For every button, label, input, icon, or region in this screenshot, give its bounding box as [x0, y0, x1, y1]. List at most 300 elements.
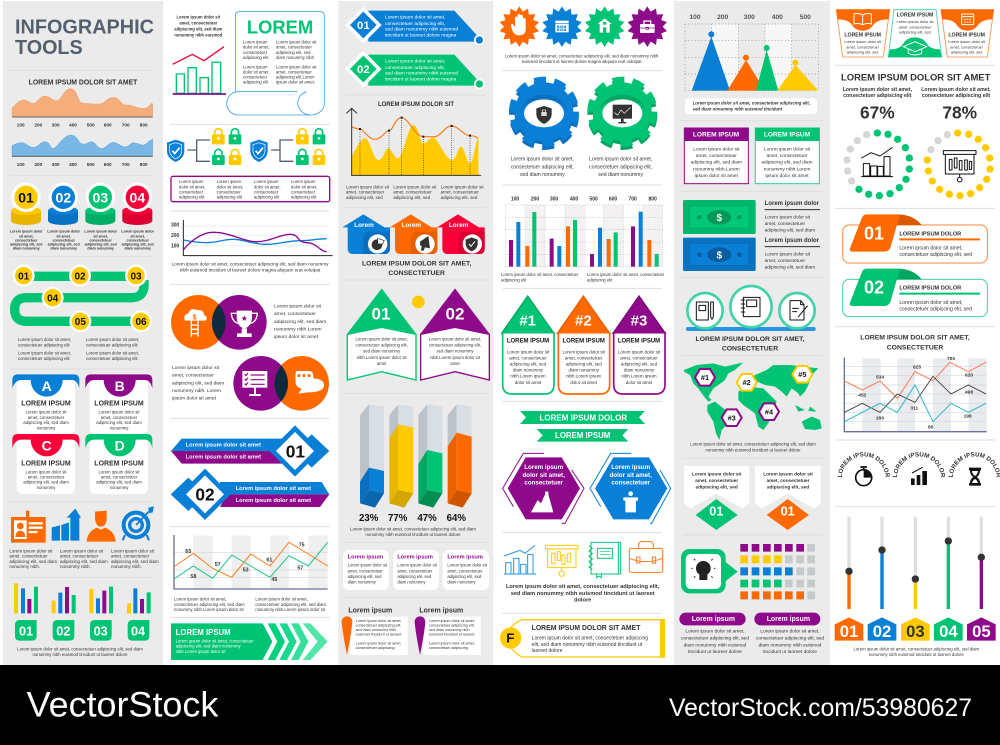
- purple text box: Lorem ipsum: [254, 179, 279, 184]
- pill right: Lorem ipsum dolor sit amet,: [760, 629, 820, 635]
- callout 02: sed diam nonummy nibh euismod: [385, 71, 458, 77]
- heading: area line chart: LOREM IPSUM DOLOR SIT: [378, 102, 454, 108]
- callout 01: consectetuer adipiscing elit,: [385, 21, 445, 27]
- number tags: 01: [19, 624, 33, 638]
- footer bar: VectorStock: [27, 686, 219, 725]
- stat text left: consectetuer adipiscing elit: [843, 93, 912, 99]
- area chart: orange: 400: [69, 123, 77, 128]
- gear captions: Lorem ipsum dolor sit amet,: [511, 157, 574, 163]
- F callout: elit, sed diam nonummy nibh euismod tincidunt ut: [532, 642, 643, 648]
- snake timeline: [13, 265, 152, 332]
- house number tags: 02: [873, 622, 891, 641]
- wave line chart: [171, 220, 333, 256]
- venn diagram 2: [233, 356, 329, 411]
- numbered card 01: Lorem ipsum dolor sit amet,: [899, 246, 963, 252]
- card C: [12, 434, 79, 494]
- slider caption: Lorem ipsum dolor sit amet, consectetuer adipiscing elit, sed diam: [854, 647, 980, 652]
- venn diagram 1: $: [193, 312, 197, 321]
- green text box: [755, 128, 820, 184]
- purple text box: adipiscing elit: [254, 195, 280, 200]
- wave line chart: 100: [171, 243, 180, 249]
- banknote blue: [683, 238, 756, 271]
- pucks captions: Lorem ipsum dolor: [10, 230, 43, 234]
- kite card green: amet, consectetuer: [695, 478, 738, 484]
- venn 1 text: ipsum dolor sit amet: [274, 334, 319, 340]
- timeline captions: Lorem ipsum dolor sit amet,: [86, 351, 139, 356]
- number tags: 04: [131, 624, 145, 638]
- rank card 3: [613, 296, 665, 394]
- number tags: [15, 620, 149, 641]
- tab card right: adipiscing elit, sed: [951, 51, 982, 55]
- F callout: laoreet dolore: [532, 648, 563, 654]
- rank card 3: LOREM IPSUM: [618, 339, 660, 345]
- rank card 3: #3: [631, 313, 647, 330]
- timeline captions: Lorem ipsum dolor sit amet,: [18, 351, 71, 356]
- pucks captions: diam nonummy: [87, 247, 114, 251]
- chart note box: Lorem ipsum dolor sit amet, consectetuer adipiscing elit,: [693, 100, 810, 105]
- chart captions: nonummy nibh.Lorem ipsum dolor sit: [255, 607, 326, 612]
- pill left: Lorem ipsum dolor sit amet,: [685, 629, 745, 635]
- teardrop note right: sed diam nonummy nibh: [429, 628, 470, 632]
- mini bar charts: [14, 583, 151, 613]
- chart captions: Lorem ipsum dolor sit amet,: [255, 597, 308, 602]
- icon: id card: [11, 511, 46, 543]
- three text cards: adipiscing elit, sed: [348, 574, 382, 579]
- column chart captions: adipiscing elit: [501, 278, 527, 283]
- scroll panel: consectetuer: [243, 75, 268, 80]
- purple text box: dolor sit amet,: [291, 185, 318, 190]
- three text cards: adipiscing elit, sed: [397, 574, 432, 579]
- three text cards: diam nonummy: [397, 580, 426, 585]
- timeline captions: consectetuer adipiscing elit: [86, 342, 138, 347]
- house card 01: amet: [377, 361, 387, 366]
- icon captions: adipiscing elit, sed diam: [111, 559, 159, 564]
- icon: outline chart: [504, 545, 536, 574]
- scroll panel: Lorem ipsum dolor sit: [276, 40, 317, 45]
- arrow house blue: Lorem: [354, 222, 374, 229]
- scroll panel: Lorem ipsum: [243, 40, 268, 45]
- area chart: orange: 300: [52, 123, 60, 128]
- timeline captions: Lorem ipsum dolor sit amet,: [18, 337, 71, 342]
- callout 02: [345, 51, 485, 89]
- purple text box: consectetuer: [217, 190, 241, 195]
- ribbon 2: LOREM IPSUM: [555, 431, 610, 440]
- area chart: blue: 600: [104, 162, 112, 167]
- card A: LOREM IPSUM: [21, 401, 71, 408]
- pucks captions: consectetuer: [15, 238, 38, 242]
- pill left: diam nonummy nibh euismod: [684, 642, 747, 648]
- teardrop note left: [342, 607, 408, 655]
- arrow house red: Lorem: [449, 222, 469, 229]
- house card 01: Lorem ipsum dolor sit amet,: [355, 337, 408, 342]
- 3d bar chart: 77%: [388, 513, 408, 524]
- kite card orange: 01: [781, 504, 795, 518]
- scroll panel: amet, consectetuer: [276, 69, 312, 74]
- gear green: [591, 80, 654, 147]
- panel: grey column 3: [338, 1, 493, 665]
- multi line chart: 198: [964, 414, 972, 420]
- arrow banner 01: [171, 425, 329, 477]
- F callout: LOREM IPSUM DOLOR SIT AMET: [532, 625, 641, 632]
- purple text box: dolor sit amet,: [217, 185, 243, 190]
- title: INFOGRAPHIC: [15, 16, 154, 38]
- rank card 2: [557, 296, 610, 394]
- tab card left: Lorem ipsum dolor sit: [844, 40, 882, 44]
- footer bar: VectorStock.com/53980627: [669, 695, 972, 722]
- F callout: Lorem ipsum dolor sit amet, consectetuer adipiscing: [532, 636, 648, 642]
- green chevron banner: adipiscing elit, sed diam nonummy: [176, 644, 242, 649]
- card D: [85, 434, 152, 494]
- multi line chart: 311: [910, 405, 919, 411]
- three text cards: adipiscing elit, sed: [447, 574, 482, 579]
- tab card middle: [888, 10, 942, 57]
- F callout: F: [506, 631, 514, 646]
- heading: consectetuer: CONSECTETUER: [388, 270, 445, 277]
- rank card 2: Lorem ipsum dolor sit: [563, 350, 606, 355]
- ribbon 2: [537, 429, 628, 442]
- banknote blue: $: [717, 250, 723, 261]
- title: TOOLS: [15, 37, 83, 59]
- banknote notes: amet, consectetuer: [765, 221, 805, 227]
- green text box: nonummy nibh.Lorem: [764, 166, 810, 172]
- rank card 1: nibh.Lorem ipsum: [510, 374, 546, 379]
- timeline captions: [18, 337, 139, 361]
- three text cards: Lorem ipsum dolor sit: [447, 563, 488, 568]
- circled icons row: [686, 286, 816, 331]
- arrow house blue: [342, 214, 390, 254]
- column chart: 100: [511, 197, 519, 203]
- stat text left: Lorem ipsum dolor sit amet,: [843, 87, 913, 93]
- chart captions: Lorem ipsum dolor sit: [441, 185, 484, 190]
- house number tags: 03: [906, 622, 925, 641]
- multi line chart: 498: [965, 389, 973, 395]
- tab card right: amet, consectetuer: [950, 45, 984, 49]
- column chart: 300: [550, 197, 558, 203]
- callout 02: Lorem ipsum dolor sit amet,: [385, 59, 445, 65]
- gear captions right: sed diam nonummy: [598, 172, 643, 178]
- card B: [85, 374, 152, 434]
- tab card right: LOREM IPSUM: [948, 33, 985, 39]
- F callout: [500, 619, 665, 658]
- starburst caption: Lorem ipsum dolor sit amet, consectetuer adipiscing elit, sed diam nonummy nibh: [505, 54, 659, 59]
- shields and locks: [167, 129, 325, 165]
- scroll panel: diam nonummy nibh: [276, 55, 315, 60]
- icon captions: Lorem ipsum dolor sit: [111, 549, 155, 554]
- slider chart: [845, 517, 985, 609]
- multi line chart: 534: [876, 375, 884, 381]
- chart captions: Lorem ipsum dolor sit: [393, 185, 437, 190]
- teardrop note left: Lorem ipsum dolor sit amet,: [356, 642, 402, 646]
- card B: amet, consectetuer: [101, 415, 138, 420]
- column chart: 700: [628, 197, 637, 203]
- chart captions: Lorem ipsum dolor sit amet,: [174, 597, 226, 602]
- tab card left: LOREM IPSUM: [844, 33, 881, 39]
- 3d bar chart: 47%: [417, 513, 437, 524]
- three text cards: amet, consectetuer: [397, 568, 433, 573]
- banknote notes: amet, consectetuer: [765, 258, 805, 264]
- callout 02: tincidunt ut laoreet dolore magna: [385, 77, 457, 83]
- dot ring yellow: [924, 129, 994, 199]
- ribbon 1: LOREM IPSUM DOLOR: [540, 413, 627, 422]
- card C: adipiscing elit, sed diam: [23, 480, 69, 485]
- card B: B: [115, 378, 125, 394]
- pill right: consectetuer adipiscing elit, sed: [756, 636, 824, 642]
- pill left: Lorem ipsum: [692, 616, 735, 623]
- teardrop note left: euismod tincidunt ut laoreet: [356, 633, 401, 637]
- pucks captions: consectetuer: [89, 238, 112, 242]
- multi line chart: 85: [928, 424, 934, 430]
- three text cards: Lorem ipsum: [397, 554, 433, 560]
- rank card 1: LOREM IPSUM: [507, 339, 549, 345]
- area line chart: [346, 108, 481, 175]
- venn 2 text: nonummy nibh. Lorem: [172, 388, 221, 394]
- rank card 3: Lorem ipsum dolor sit: [618, 350, 661, 355]
- purple text box: Lorem ipsum: [179, 179, 204, 184]
- icon captions: Lorem ipsum dolor sit: [60, 549, 104, 554]
- callout 01: 01: [357, 20, 370, 32]
- numbered card 02: Lorem ipsum dolor sit amet,: [899, 300, 963, 306]
- tab card middle: Lorem ipsum dolor sit: [897, 20, 934, 24]
- icons caption: Lorem ipsum dolor sit amet, consectetuer adipiscing elit,: [506, 584, 660, 590]
- card C: LOREM IPSUM: [21, 460, 71, 467]
- arrow house red: [437, 214, 485, 254]
- purple text box: LOREM IPSUM: [693, 132, 740, 139]
- green text box: ipsum dolor sit amet: [765, 173, 809, 179]
- scroll panel: dolor sit amet,: [243, 69, 270, 74]
- percentages: 78%: [942, 102, 977, 122]
- three text cards: amet, consectetuer: [447, 568, 483, 573]
- starburst caption: euismod tincidunt ut laoreet dolore magna aliquam erat volutpat: [522, 59, 642, 64]
- card A: adipiscing elit, sed diam: [23, 420, 69, 425]
- kite card orange: amet, consectetuer: [766, 478, 810, 484]
- timeline captions: Lorem ipsum dolor sit amet,: [86, 337, 139, 342]
- yellow dot: [412, 296, 425, 308]
- arrow banner 02: [171, 469, 329, 520]
- chart captions: consectetuer adipiscing elit, sed diam: [255, 602, 326, 607]
- area chart: blue: [12, 135, 153, 167]
- callout 01: sed diam nonummy nibh euismod: [385, 27, 458, 33]
- square grid chart: [740, 544, 815, 599]
- three text cards: Lorem ipsum dolor sit: [348, 563, 388, 568]
- stat text right: Lorem ipsum dolor sit amet,: [921, 87, 991, 93]
- kite card orange: [755, 466, 821, 530]
- chart note box: sed diam nonummy nibh euismod tincidunt: [693, 106, 783, 111]
- house card 02: sed diam nonummy: [436, 349, 474, 354]
- purple text box: adipiscing elit: [217, 195, 243, 200]
- green chevron banner: LOREM IPSUM: [176, 628, 231, 637]
- column 3 upper: [342, 7, 490, 380]
- world map: [684, 362, 822, 440]
- venn 2 text: adipiscing elit, sed diam: [172, 380, 224, 386]
- zigzag line chart: 61: [266, 557, 272, 563]
- tab card middle: amet, consectetuer: [899, 25, 932, 29]
- green text box: Lorem ipsum dolor sit: [764, 147, 811, 153]
- icon captions: amet, consectetuer: [111, 554, 150, 559]
- rank card 2: diam nonummy: [569, 368, 600, 373]
- heading: area charts: LOREM IPSUM DOLOR SIT AMET: [29, 80, 138, 87]
- purple text box: adipiscing elit: [291, 195, 317, 200]
- wave line chart: 300: [171, 223, 180, 229]
- column 1 lower: [9, 337, 159, 657]
- purple text box: [684, 128, 749, 184]
- multi line chart: 625: [913, 365, 921, 371]
- area chart: orange: 700: [122, 123, 130, 128]
- numbered card 01: [843, 214, 987, 263]
- teardrop note left: Lorem ipsum dolor sit amet,: [356, 619, 402, 623]
- card A: [12, 374, 79, 434]
- teardrop note left: consectetuer adipiscing elit,: [356, 623, 401, 627]
- area chart: blue: 500: [87, 162, 95, 167]
- purple text box: ipsum dolor sit amet: [695, 173, 739, 179]
- triangle chart: 400: [772, 14, 783, 21]
- gear captions right: consectetuer adipiscing elit,: [589, 164, 652, 170]
- card C: C: [42, 438, 52, 454]
- numbered card 01: consectetuer adipiscing elit, sed: [899, 252, 972, 258]
- numbered card 01: 01: [864, 223, 884, 243]
- gear captions right: Lorem ipsum dolor sit amet,: [589, 157, 652, 163]
- column chart captions: Lorem ipsum dolor sit amet, consectetuer: [587, 272, 665, 277]
- intro text: amet, consectetuer: [179, 21, 218, 26]
- bottom caption: Lorem ipsum dolor sit amet, consectetuer adipiscing elit, sed diam: [17, 647, 143, 652]
- callout 01: Lorem ipsum dolor sit amet,: [385, 15, 445, 21]
- pucks captions: adipiscing elit, sed: [85, 243, 117, 247]
- timeline captions: consectetuer adipiscing elit: [86, 356, 138, 361]
- triangle chart: 200: [717, 14, 729, 21]
- rank card 1: adipiscing elit, sed: [510, 362, 547, 367]
- hexagon blue: consectetuer: [611, 480, 651, 487]
- three text cards: [343, 550, 489, 590]
- chart captions: adipiscing elit, sed: [441, 195, 478, 200]
- pucks captions: consectetuer: [126, 238, 149, 242]
- icon captions: nonummy nibh.: [111, 564, 142, 569]
- scroll panel: consectetuer: [243, 50, 268, 55]
- tab card middle: LOREM IPSUM: [897, 13, 933, 19]
- area chart: orange: 500: [87, 123, 95, 128]
- column chart: [506, 197, 662, 267]
- slider caption: nonummy nibh euismod tincidunt ut laoreet dolore: [869, 652, 964, 657]
- arc label stopwatch: LOREM IPSUM DOLOR: [838, 452, 890, 478]
- icon: outline presentation board: [546, 545, 578, 576]
- heading: world map: CONSECTETUER: [722, 346, 778, 353]
- teardrop note right: Lorem ipsum dolor sit amet,: [429, 642, 475, 646]
- tab card left: adipiscing elit, sed: [847, 51, 878, 55]
- number tags: 03: [94, 624, 108, 638]
- scroll panel: adipiscing elit.Lorem: [276, 75, 315, 80]
- numbered pucks: 04: [130, 189, 145, 205]
- chart captions: nonummy nibh.Lorem ipsum dolor sit: [174, 607, 245, 612]
- column 4 upper: [500, 6, 667, 394]
- arrow banner 02: 02: [195, 485, 215, 505]
- rank card 1: dolor sit amet: [515, 380, 542, 385]
- hexagon blue: [590, 453, 671, 523]
- column chart: 500: [589, 197, 598, 203]
- rank card 2: nibh.Lorem ipsum: [566, 374, 602, 379]
- zigzag line chart: 45: [271, 577, 277, 583]
- numbered pucks: 02: [56, 189, 71, 205]
- zigzag line chart: 65: [185, 549, 191, 555]
- scroll panel: dolor sit amet,: [243, 45, 270, 50]
- three text cards: Lorem ipsum: [447, 554, 483, 560]
- chart captions: consectetuer adipiscing elit, sed diam: [174, 602, 245, 607]
- 3d bar chart: 64%: [447, 513, 466, 524]
- numbered card 02: 02: [864, 278, 884, 298]
- footer bar: [0, 665, 1000, 745]
- area chart: blue: 100: [17, 162, 25, 167]
- callout 02: consectetuer adipiscing elit,: [385, 65, 445, 71]
- world map: #1: [701, 373, 709, 382]
- icon: outline briefcase: [629, 542, 663, 572]
- pucks captions: diam nonummy: [50, 247, 77, 251]
- teardrop note right: Lorem ipsum dolor sit amet,: [429, 619, 475, 623]
- heading: multi line chart: CONSECTETUER: [887, 344, 943, 351]
- kite card green: adipiscing elit, sed: [696, 484, 738, 490]
- icon captions: amet, consectetuer: [60, 554, 99, 559]
- multi line chart: 620: [965, 373, 973, 379]
- world map: #5: [798, 370, 806, 379]
- world map: #4: [765, 407, 774, 416]
- hexagon purple: [503, 453, 584, 523]
- green chevron banner: nibh.Lorem ipsum dolor sit: [176, 649, 226, 654]
- pucks captions: [10, 230, 155, 251]
- pill right: Lorem ipsum: [767, 616, 810, 623]
- pill left: [679, 613, 749, 655]
- icon captions: Lorem ipsum dolor sit: [9, 549, 53, 554]
- banknote notes: Lorem ipsum dolor sit: [765, 252, 811, 258]
- chart caption: nibh euismod tincidunt ut laoreet dolore magna aliquam erat volutpat: [180, 268, 321, 273]
- purple text box: Lorem ipsum: [291, 179, 316, 184]
- card D: Lorem ipsum dolor sit: [98, 469, 140, 474]
- teardrop note left: consectetuer adipiscing: [356, 646, 395, 650]
- intro text: adipiscing elit, sed diam: [174, 27, 223, 32]
- venn diagram 1: ★: [241, 314, 248, 323]
- house card 02: amet: [450, 361, 461, 366]
- multi line chart: [844, 356, 987, 432]
- purple text box: consectetuer: [179, 190, 204, 195]
- bar and line chart: [173, 47, 226, 94]
- pucks captions: Lorem ipsum dolor: [121, 230, 155, 234]
- number tags: 02: [56, 624, 70, 638]
- rank card 1: Lorem ipsum dolor sit: [507, 350, 550, 355]
- house number tags: 04: [939, 622, 958, 641]
- chart captions: [174, 597, 326, 612]
- banknote green: $: [717, 213, 723, 224]
- card A: amet, consectetuer: [28, 415, 65, 420]
- pill left: tincidunt ut laoreet dolore: [688, 649, 742, 655]
- zigzag line chart: 57: [297, 565, 303, 571]
- purple text box: dolor sit amet,: [254, 185, 280, 190]
- scroll panel: [227, 12, 324, 115]
- chart captions: amet, consectetuer: [346, 190, 385, 195]
- card C: nonummy: [37, 485, 56, 490]
- world map: #2: [743, 378, 751, 387]
- icon: target: [123, 506, 154, 540]
- rank card 2: LOREM IPSUM: [562, 339, 605, 345]
- area chart: orange: 800: [140, 123, 148, 128]
- purple text box: Lorem ipsum: [217, 179, 242, 184]
- area chart: blue: 400: [69, 162, 77, 167]
- banknote notes: Lorem ipsum dolor: [765, 201, 820, 207]
- arrow banner 01: 01: [286, 442, 305, 462]
- card D: D: [115, 438, 125, 454]
- rank card 1: amet, consectetuer: [509, 356, 547, 361]
- chart captions: [346, 185, 484, 200]
- chart captions: Lorem ipsum dolor sit: [346, 185, 390, 190]
- pill right: [754, 613, 824, 655]
- green text box: LOREM IPSUM: [764, 132, 811, 139]
- icon captions: adipiscing elit, sed diam: [9, 559, 57, 564]
- house card 01: consectetuer adipiscing elit,: [356, 343, 408, 348]
- house card 02: [420, 288, 490, 380]
